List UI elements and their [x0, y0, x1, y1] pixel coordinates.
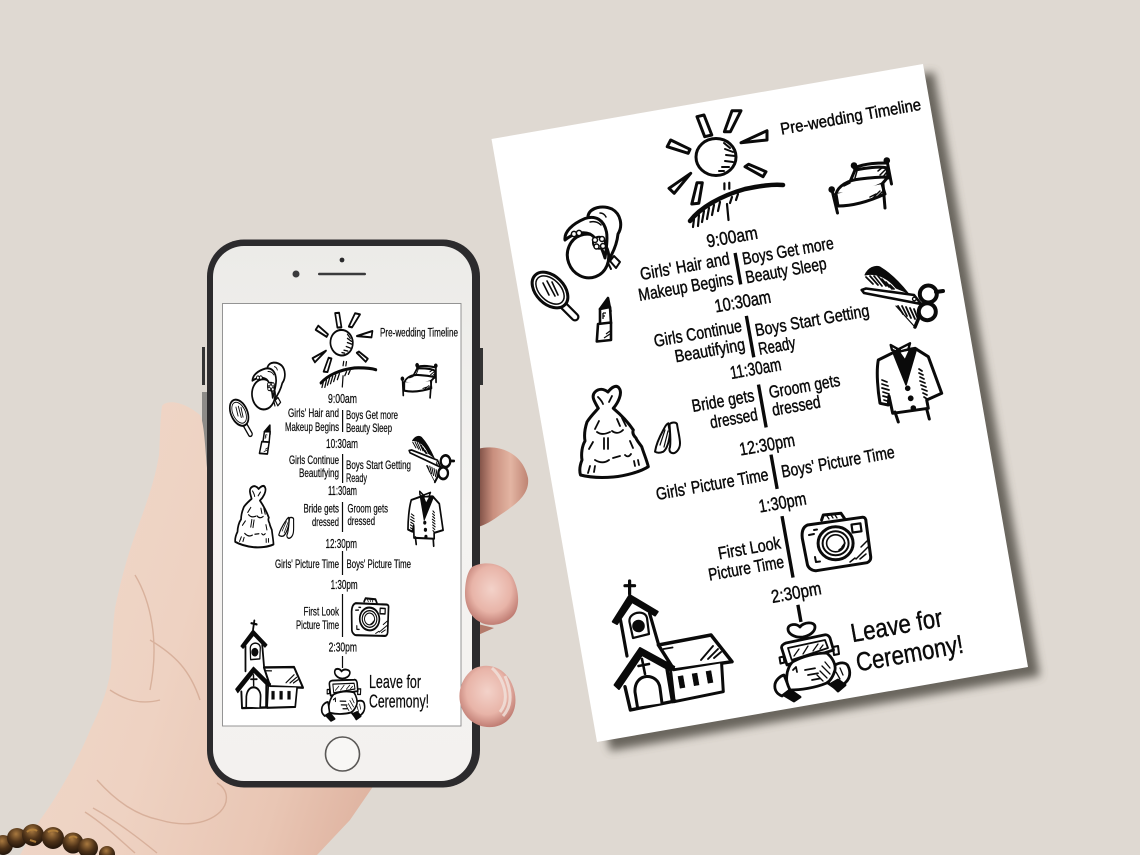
timeline text and dividers: Bride gets — [690, 386, 756, 416]
timeline text and dividers: 2:30pm — [329, 641, 357, 655]
timeline text and dividers — [612, 207, 921, 643]
timeline text and dividers: dressed — [312, 515, 339, 529]
icon: mirror — [223, 393, 255, 434]
panel: printed timeline card — [492, 64, 1028, 742]
lower finger in front of phone — [459, 666, 515, 727]
timeline text and dividers: Bride gets — [304, 502, 339, 516]
icon: lipstick — [597, 298, 611, 342]
icon: wedding dress — [235, 482, 281, 552]
icon: scissors and comb — [862, 266, 943, 327]
timeline text and dividers: Boys Get more — [346, 408, 398, 422]
screen — [222, 304, 461, 726]
icon: mirror — [525, 265, 575, 317]
heading: Pre-wedding Timeline: Pre-wedding Timeline — [380, 328, 458, 340]
timeline text and dividers: 9:00am — [328, 392, 357, 406]
callout: Leave for Ceremony: Leave for — [369, 672, 421, 692]
timeline text and dividers: Beautifying — [673, 335, 747, 367]
icon: tuxedo jacket — [877, 343, 942, 422]
icon: shoes — [279, 515, 295, 539]
home button — [326, 737, 360, 771]
icon: church — [613, 581, 732, 710]
timeline text and dividers: 10:30am — [713, 288, 773, 317]
callout: Leave for Ceremony: Ceremony! — [369, 692, 429, 712]
callout: Leave for Ceremony — [849, 601, 966, 678]
camera dot — [292, 270, 300, 278]
panel: smartphone — [204, 240, 482, 788]
finger behind phone — [478, 447, 528, 527]
timeline text and dividers: dressed — [770, 392, 822, 420]
icon: camera — [802, 513, 871, 571]
timeline text and dividers: 12:30pm — [738, 431, 796, 460]
timeline text and dividers: 1:30pm — [331, 578, 358, 592]
palm creases — [85, 575, 226, 853]
icon: wedding dress — [580, 386, 648, 477]
timeline text and dividers: 10:30am — [326, 437, 358, 451]
phone body — [207, 240, 480, 788]
timeline text and dividers: 11:30am — [328, 484, 357, 498]
timeline text and dividers: Girls' Picture Time — [654, 465, 770, 504]
timeline text and dividers: Girls' Picture Time — [275, 557, 339, 571]
callout: Leave for Ceremony: Ceremony! — [854, 630, 966, 678]
timeline text and dividers: Groom gets — [767, 371, 842, 403]
icon: bed — [830, 159, 892, 213]
timeline text and dividers: 11:30am — [729, 355, 783, 383]
callout: Leave for Ceremony: Leave for — [849, 604, 945, 648]
phone front glass — [213, 246, 472, 781]
timeline text and dividers: Boys Start Getting — [753, 301, 871, 341]
timeline text and dividers: Picture Time — [707, 552, 786, 585]
timeline text and dividers: dressed — [348, 514, 375, 528]
speaker — [318, 273, 366, 275]
icon: sun — [667, 111, 783, 227]
timeline text and dividers: 1:30pm — [757, 489, 808, 517]
timeline text and dividers: Girls Continue — [289, 453, 339, 467]
icon: tuxedo jacket — [405, 488, 448, 550]
timeline text and dividers: Ready — [757, 333, 797, 359]
timeline text and dividers: Beauty Sleep — [346, 421, 392, 435]
timeline text and dividers: Beauty Sleep — [744, 254, 828, 288]
phone side strip behind thumb — [202, 392, 208, 472]
timeline text and dividers: Boys Start Getting — [346, 458, 411, 472]
icon: hair — [561, 207, 621, 284]
timeline text and dividers: Girls' Hair and — [288, 406, 339, 420]
timeline text and dividers — [275, 392, 411, 668]
icon: camera — [348, 595, 392, 642]
icon: hair — [246, 358, 286, 417]
bead bracelet — [0, 824, 115, 855]
finger in front of phone — [465, 563, 518, 625]
icon: lipstick — [259, 424, 272, 455]
callout: Leave for Ceremony — [369, 672, 429, 712]
timeline text and dividers: 9:00am — [705, 223, 759, 252]
timeline text and dividers: 12:30pm — [326, 537, 357, 551]
icon: bed — [399, 358, 439, 402]
timeline text and dividers: dressed — [709, 405, 759, 433]
paper shadow — [503, 72, 1040, 751]
heading: Pre-wedding Timeline: Pre-wedding Timeline — [779, 95, 922, 138]
hand and palm behind phone — [20, 402, 480, 855]
timeline text and dividers: Ready — [346, 471, 367, 485]
phone side buttons — [204, 347, 482, 385]
screen content — [223, 305, 458, 728]
card text — [595, 95, 1018, 707]
icon: scissors and comb — [405, 434, 456, 485]
timeline text and dividers: Boys' Picture Time — [780, 443, 896, 482]
timeline text and dividers: First Look — [717, 533, 782, 564]
front sensor — [340, 258, 344, 262]
timeline text and dividers: Boys Get more — [741, 234, 835, 269]
timeline text and dividers: Makeup Begins — [637, 269, 735, 305]
finger joint stub — [478, 624, 494, 635]
icon: getaway car — [320, 666, 369, 728]
timeline text and dividers: Picture Time — [296, 618, 339, 632]
icon: church — [232, 619, 311, 720]
timeline text and dividers: 2:30pm — [770, 579, 823, 607]
icon: sun — [308, 305, 383, 398]
timeline text and dividers: Girls Continue — [652, 316, 743, 351]
icon: getaway car — [775, 623, 850, 701]
timeline text and dividers: First Look — [304, 605, 340, 619]
timeline text and dividers: Girls' Hair and — [639, 249, 731, 284]
timeline text and dividers: Groom gets — [348, 502, 388, 516]
card sheet — [492, 64, 1028, 742]
timeline text and dividers: Beautifying — [299, 466, 339, 480]
timeline text and dividers: Makeup Begins — [285, 420, 339, 434]
icon: shoes — [655, 422, 680, 453]
timeline text and dividers: Boys' Picture Time — [346, 557, 411, 571]
